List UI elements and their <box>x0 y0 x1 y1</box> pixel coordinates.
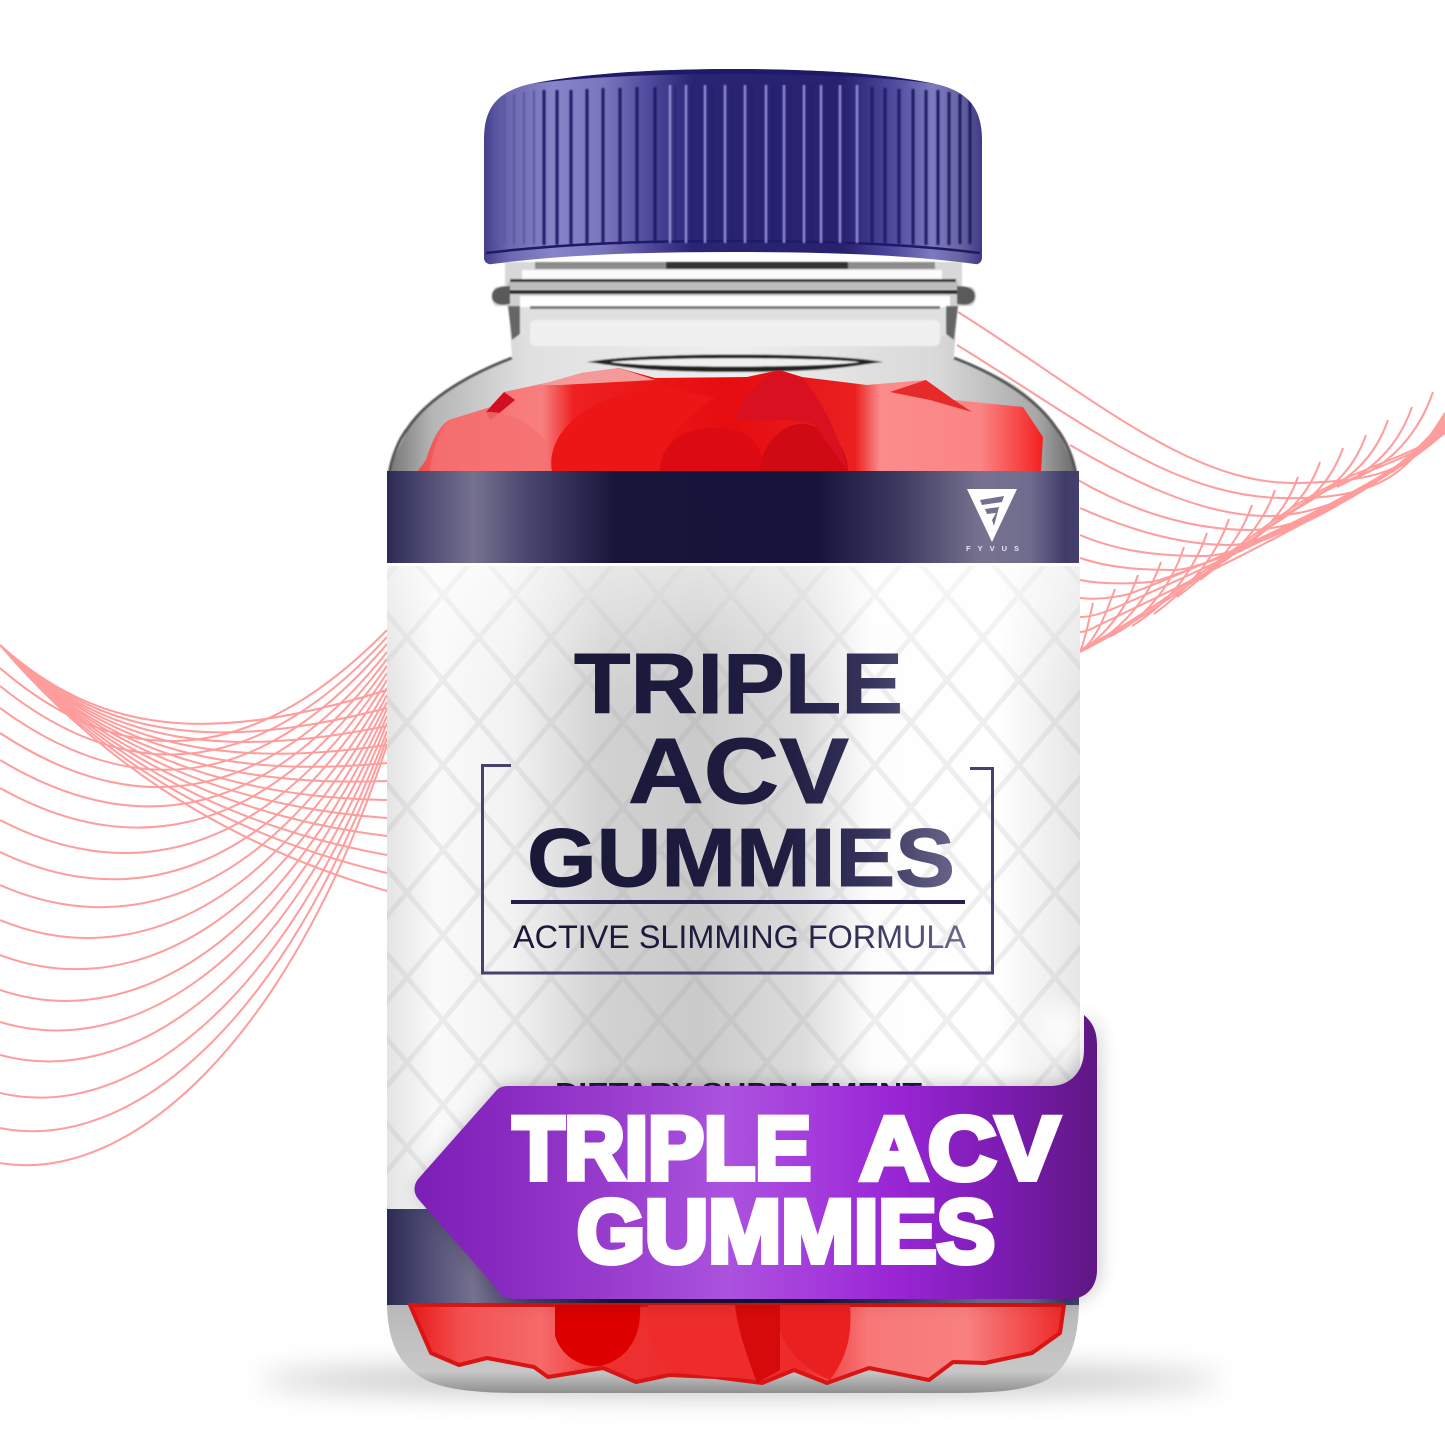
product title on label <box>527 637 955 904</box>
cap <box>484 69 982 265</box>
ground shadow <box>260 1367 1220 1393</box>
label frame and rule <box>482 766 992 973</box>
dietary supplement text: DIETARY SUPPLEMENT <box>555 1077 922 1107</box>
brand logo: FYVUS <box>966 544 1019 553</box>
top navy band <box>387 471 1079 563</box>
wave lines: right <box>957 312 1445 652</box>
product title on label: ACV <box>628 719 849 823</box>
glass neck and shoulder <box>389 262 1076 475</box>
bottom navy band <box>387 1209 1079 1305</box>
ribbon title: ACV <box>860 1098 1059 1198</box>
ribbon title: TRIPLE <box>513 1098 811 1198</box>
white flap highlight <box>1040 1005 1084 1055</box>
brand logo <box>966 489 1019 553</box>
tagline: ACTIVE SLIMMING FORMULA <box>513 919 967 955</box>
purple ribbon <box>414 1015 1097 1299</box>
ribbon title: GUMMIES <box>577 1181 995 1281</box>
white label <box>387 563 1080 1209</box>
wave lines: left <box>0 630 387 1165</box>
ribbon shadow <box>415 1015 1097 1299</box>
bottle <box>387 262 1080 1393</box>
gummies: bottom <box>410 1305 1064 1383</box>
gummies: top <box>418 368 1043 471</box>
ribbon title <box>513 1098 1059 1281</box>
product title on label: TRIPLE <box>574 637 903 732</box>
product title on label: GUMMIES <box>527 811 955 904</box>
glass base <box>387 1305 1079 1393</box>
